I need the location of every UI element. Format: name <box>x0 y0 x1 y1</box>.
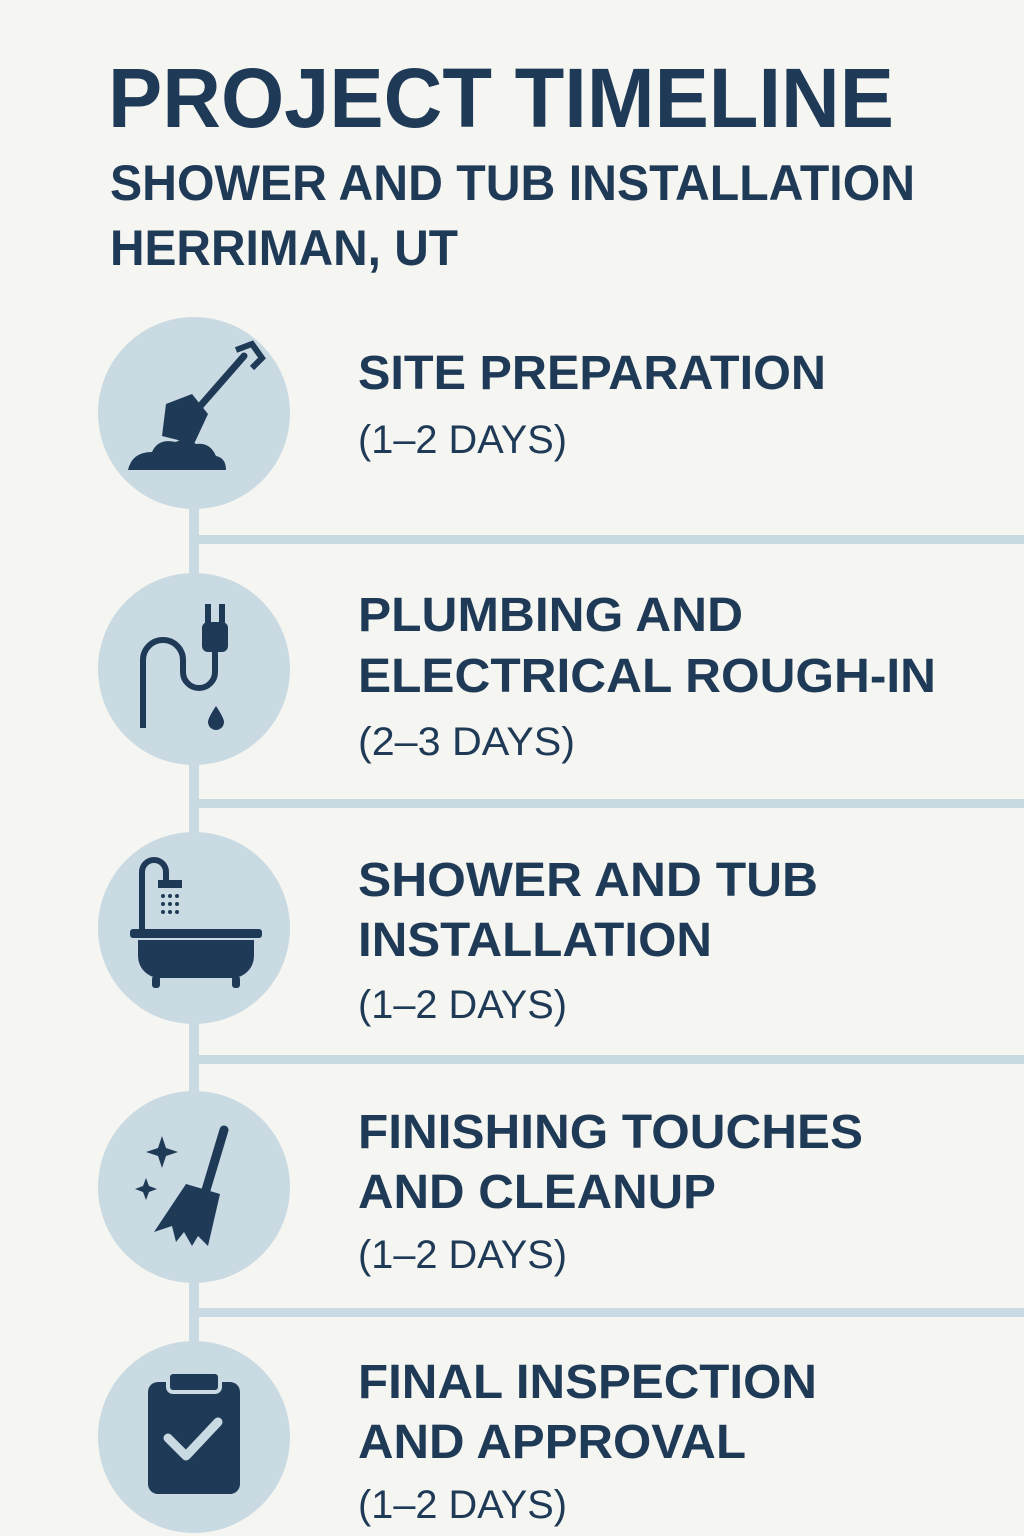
subtitle <box>110 155 915 276</box>
step 2: plumbing and electrical: (2–3 DAYS) <box>358 720 575 764</box>
step 5: final inspection: (1–2 DAYS) <box>358 1483 567 1527</box>
step 3: shower and tub: INSTALLATION <box>358 914 712 967</box>
step 5: final inspection: AND APPROVAL <box>358 1416 746 1469</box>
step 5: final inspection <box>98 1341 817 1533</box>
step 5: final inspection: FINAL INSPECTION <box>358 1356 817 1409</box>
title: PROJECT TIMELINE <box>108 51 894 145</box>
step 2: plumbing and electrical: ELECTRICAL ROUGH-IN <box>358 650 936 703</box>
step 2: plumbing and electrical <box>98 573 936 765</box>
step 4: finishing touches: AND CLEANUP <box>358 1166 716 1219</box>
step 4: finishing touches: (1–2 DAYS) <box>358 1233 567 1277</box>
icon: broom and sparkles <box>98 1091 290 1283</box>
step 1: site preparation: SITE PREPARATION <box>358 347 826 400</box>
step 3: shower and tub <box>98 832 818 1027</box>
icon: shovel <box>98 317 290 509</box>
icon: clipboard check <box>98 1341 290 1533</box>
step 4: finishing touches <box>98 1091 863 1283</box>
step 2: plumbing and electrical: PLUMBING AND <box>358 589 743 642</box>
step 4: finishing touches: FINISHING TOUCHES <box>358 1106 863 1159</box>
subtitle: HERRIMAN, UT <box>110 220 458 276</box>
step 1: site preparation <box>98 317 826 509</box>
step 3: shower and tub: (1–2 DAYS) <box>358 983 567 1027</box>
icon: pipe and plug <box>98 573 290 765</box>
step 3: shower and tub: SHOWER AND TUB <box>358 854 818 907</box>
step 1: site preparation: (1–2 DAYS) <box>358 418 567 462</box>
timeline connector <box>189 490 1024 1490</box>
icon: bathtub <box>98 832 290 1024</box>
subtitle: SHOWER AND TUB INSTALLATION <box>110 155 915 211</box>
